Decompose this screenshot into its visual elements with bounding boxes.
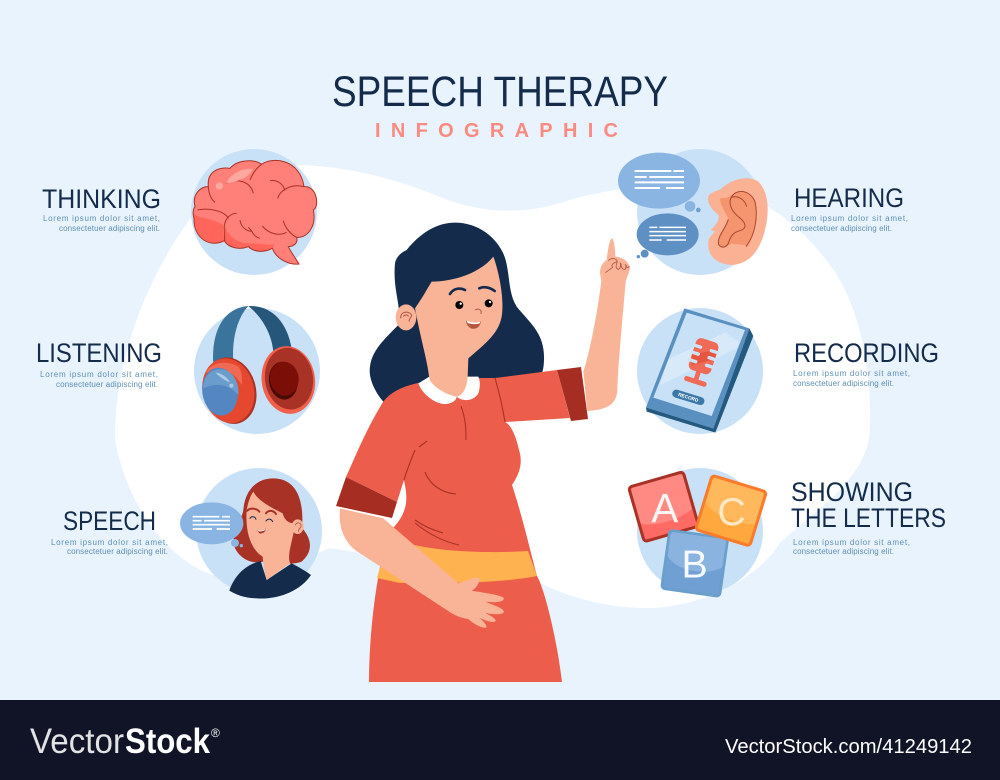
icon: alphabet blocks xyxy=(629,468,766,596)
label: listening: LISTENING xyxy=(36,338,162,368)
collar, face and features xyxy=(396,257,502,404)
icon: alphabet blocks: A xyxy=(651,485,679,531)
icon: speaking woman xyxy=(180,468,322,599)
label: recording: consectetuer adipiscing elit. xyxy=(793,379,894,388)
icon: ear with speech bubbles xyxy=(618,149,768,275)
icon: alphabet blocks: C xyxy=(717,490,746,534)
footer bar xyxy=(0,700,1000,780)
footer image id: VectorStock.com/41249142 xyxy=(725,735,972,758)
label: recording: Lorem ipsum dolor sit amet, xyxy=(793,369,910,378)
label: hearing: consectetuer adipiscing elit. xyxy=(791,224,892,233)
label: recording: RECORDING xyxy=(794,338,939,368)
label: thinking: consectetuer adipiscing elit. xyxy=(59,224,160,233)
label: speech: SPEECH xyxy=(63,506,156,536)
label: speech: consectetuer adipiscing elit. xyxy=(67,547,168,556)
title xyxy=(332,69,668,142)
raised arm xyxy=(583,238,630,411)
label: speech: Lorem ipsum dolor sit amet, xyxy=(51,538,168,547)
label: thinking: THINKING xyxy=(42,184,161,214)
icon: alphabet blocks: B xyxy=(682,542,708,586)
footer logo: Vector xyxy=(30,722,124,761)
label: hearing xyxy=(791,183,908,233)
footer logo: ® xyxy=(211,726,220,740)
icon: recording tablet: RECORD xyxy=(677,392,700,404)
title: INFOGRAPHIC xyxy=(375,120,618,142)
icon: headphones xyxy=(194,306,320,434)
label: listening xyxy=(36,338,162,389)
sleeve cuffs xyxy=(336,367,588,518)
resting arm and hand xyxy=(340,508,504,628)
title: SPEECH THERAPY xyxy=(332,69,668,116)
label: listening: consectetuer adipiscing elit. xyxy=(56,380,158,389)
label: showing the letters: THE LETTERS xyxy=(791,503,946,533)
icon: brain xyxy=(191,149,317,275)
icon: recording tablet xyxy=(637,308,763,434)
red dress xyxy=(346,370,570,682)
hair back xyxy=(370,223,544,402)
label: showing the letters xyxy=(791,477,946,556)
label: showing the letters: SHOWING xyxy=(791,477,913,507)
label: showing the letters: Lorem ipsum dolor sit amet, xyxy=(793,538,910,547)
label: thinking xyxy=(42,184,161,233)
label: thinking: Lorem ipsum dolor sit amet, xyxy=(43,214,160,223)
label: recording xyxy=(793,338,939,388)
label: listening: Lorem ipsum dolor sit amet, xyxy=(40,370,158,379)
label: speech xyxy=(51,506,168,556)
footer logo: Stock xyxy=(125,722,210,761)
label: hearing: Lorem ipsum dolor sit amet, xyxy=(791,214,908,223)
footer logo xyxy=(30,722,220,761)
label: showing the letters: consectetuer adipiscing elit. xyxy=(793,547,894,556)
label: hearing: HEARING xyxy=(794,183,904,213)
yellow belt xyxy=(377,544,537,583)
illustration: woman pointing xyxy=(336,223,630,682)
